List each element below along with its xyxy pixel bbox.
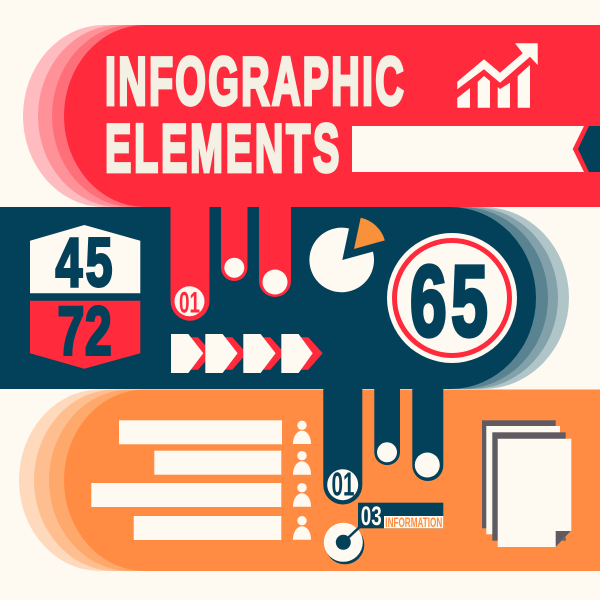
badge: 65 circle: 65 xyxy=(410,245,488,357)
title: line one: INFOGRAPHIC xyxy=(105,43,404,119)
navy drip with 01 xyxy=(323,385,362,504)
badge: 72 on red shield: 72 xyxy=(58,292,112,370)
red drip with small circle xyxy=(221,207,248,281)
icon: people xyxy=(293,421,311,540)
panel: navy band xyxy=(0,207,569,389)
title: line two: ELEMENTS xyxy=(105,110,339,186)
navy drip with large circle xyxy=(412,385,443,481)
badge: 45 on white shield: 45 xyxy=(56,223,113,301)
badge: 65 circle xyxy=(387,233,517,363)
ribbon arrow tip xyxy=(578,126,600,172)
icon: target pointer xyxy=(324,523,364,564)
chevron arrows xyxy=(171,334,323,373)
icon: rising bar chart with arrow xyxy=(457,43,538,108)
list bars xyxy=(91,420,282,540)
badge: 45 on white shield xyxy=(30,223,140,301)
information label: INFORMATION xyxy=(385,515,442,530)
ribbon banner xyxy=(352,126,584,172)
icon: stacked papers xyxy=(482,420,571,547)
red drip with 01: 01 xyxy=(179,286,200,319)
navy drip with small circle xyxy=(374,385,400,465)
navy drip with 01: 01 xyxy=(332,466,354,503)
panel: orange band xyxy=(19,385,600,571)
information label: 03 xyxy=(361,501,382,531)
red drip with large circle xyxy=(259,207,291,297)
badge: 72 on red shield xyxy=(30,292,140,370)
information label xyxy=(358,501,443,531)
pie chart xyxy=(309,218,385,292)
panel: red title band xyxy=(23,25,600,207)
red drip with 01 xyxy=(170,207,210,321)
